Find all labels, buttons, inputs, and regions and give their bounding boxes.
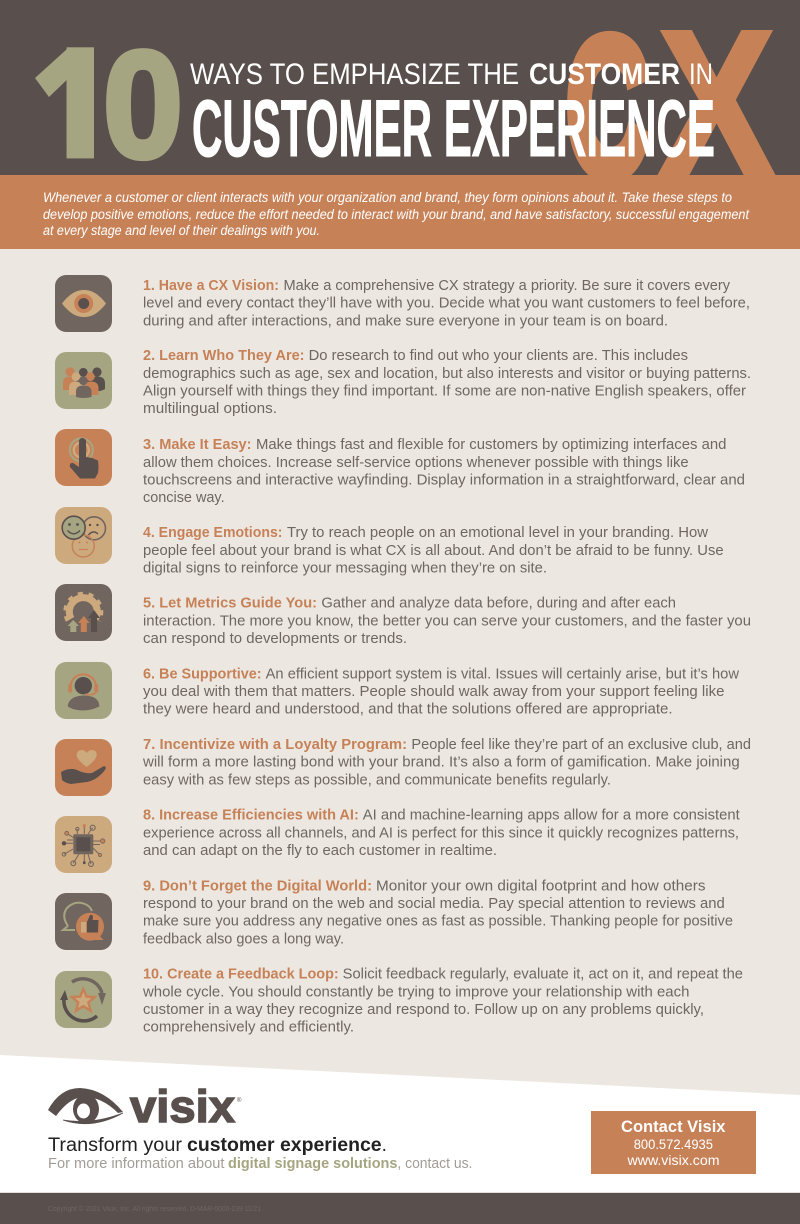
panel: header <box>0 0 800 175</box>
item 2 text: Do research to find out who your clients are. This includes <box>309 348 688 364</box>
tagline: customer experience <box>187 1135 382 1156</box>
logo: visix eye: ® <box>237 1097 242 1104</box>
item 8 text: AI and machine-learning apps allow for a more consistent <box>363 808 740 824</box>
panel: intro band <box>0 175 800 249</box>
icon: feedback loop star <box>55 971 112 1028</box>
tagline: . <box>382 1135 387 1156</box>
item 6 text: you deal with them that matters. People should walk away from your support feeling like <box>143 684 724 700</box>
contact box <box>591 1111 756 1174</box>
icon: touch hand <box>55 429 112 486</box>
item 2 text <box>143 348 751 417</box>
item 10 text <box>142 967 743 1036</box>
title line 1: WAYS TO EMPHASIZE THE <box>190 58 519 91</box>
item 3 text: 3. Make It Easy: <box>143 437 252 453</box>
item 10 text: 10. Create a Feedback Loop: <box>143 967 339 983</box>
item 8 text: and can adapt on the fly to each customer in realtime. <box>143 843 497 859</box>
item 4 text <box>143 525 724 577</box>
item 1 text: Make a comprehensive CX strategy a priority. Be sure it covers every <box>284 278 731 294</box>
item 8 text: experience across all channels, and AI is perfect for this since it quickly recognizes patterns, <box>143 825 739 841</box>
item 2 text: multilingual options. <box>143 401 277 417</box>
item 2 text: Align yourself with things they find important. If some are non-native English speakers, offer <box>143 384 746 400</box>
item 2 text: demographics such as age, sex and location, but also interests and visitor or buying patterns. <box>143 366 751 382</box>
item 5 text: can respond to developments or trends. <box>143 631 407 647</box>
big CX watermark <box>567 30 776 175</box>
tagline: Transform your <box>48 1135 183 1156</box>
big CX watermark: C <box>566 0 648 216</box>
icon: social thumbs up <box>55 893 112 950</box>
icon: support agent <box>55 662 112 719</box>
icon: people group <box>55 352 112 409</box>
panel: footer <box>0 1055 800 1193</box>
intro text <box>43 190 750 238</box>
logo wordmark: visix <box>130 1081 235 1132</box>
item 4 text: Try to reach people on an emotional level in your branding. How <box>287 525 709 541</box>
item 7 text: will form a more lasting bond with your brand. It’s also a form of gamification. Make joining <box>142 755 740 771</box>
item 10 text: customer in a way they recognize and respond to. Follow up on any problems quickly, <box>143 1002 704 1018</box>
item 3 text: concise way. <box>143 490 225 506</box>
contact box: Contact Visix <box>621 1118 726 1136</box>
item 7 text: People feel like they’re part of an exclusive club, and <box>411 737 751 753</box>
big number 10 <box>35 47 180 162</box>
big number 10: 1 <box>32 20 112 190</box>
item 5 text: interaction. The more you know, the better you can serve your customers, and the faster you <box>143 613 751 629</box>
item 9 text: make sure you address any negative ones as fast as possible. Thanking people for positive <box>143 914 733 930</box>
icon: heart in hand <box>55 739 112 796</box>
copyright text: Copyright © 2021 Visix, Inc. All rights reserved. D-MAR-0000-239 11/21 <box>48 1204 261 1213</box>
big number 10: 0 <box>103 20 183 190</box>
item 7 text <box>142 737 751 788</box>
item 2 text: 2. Learn Who They Are: <box>143 348 304 364</box>
icon: emotion faces <box>55 507 112 564</box>
icon: eye <box>55 275 112 332</box>
item 5 text <box>143 596 751 647</box>
item 8 text: 8. Increase Efficiencies with AI: <box>143 808 359 824</box>
item 3 text <box>143 437 745 506</box>
item 4 text: digital signs to reinforce your messaging when they’re on site. <box>143 561 547 577</box>
item 3 text: Make things fast and flexible for customers by optimizing interfaces and <box>256 437 726 453</box>
item 1 text: 1. Have a CX Vision: <box>143 278 279 294</box>
icon: AI chip <box>55 816 112 873</box>
contact line: digital signage solutions <box>228 1155 397 1172</box>
item 8 text <box>143 808 740 859</box>
intro text: at every stage and level of their dealings with you. <box>43 223 320 238</box>
item 4 text: 4. Engage Emotions: <box>143 525 282 541</box>
title line 1: CUSTOMER <box>529 58 680 91</box>
item 9 text: Monitor your own digital footprint and how others <box>376 878 706 894</box>
item 1 text: during and after interactions, and make sure everyone in your team is on board. <box>143 313 668 329</box>
intro text: Whenever a customer or client interacts with your organization and brand, they form opinions about it. Take these steps to <box>43 190 732 205</box>
contact box: 800.572.4935 <box>634 1137 713 1152</box>
intro text: develop positive emotions, reduce the effort needed to interact with your brand, and have satisfactory, successful engagement <box>43 207 750 222</box>
icon: metrics gear <box>55 584 112 641</box>
item 6 text: 6. Be Supportive: <box>143 666 262 682</box>
panel: copyright bar <box>0 1192 800 1224</box>
item 6 text: they were heard and understood, and that the solutions offered are appropriate. <box>143 702 673 718</box>
item 10 text: whole cycle. You should constantly be trying to improve your relationship with each <box>142 984 689 1000</box>
tagline <box>48 1135 387 1156</box>
item 9 text: feedback also goes a long way. <box>143 931 344 947</box>
logo: visix eye <box>48 1081 242 1132</box>
contact box: www.visix.com <box>626 1153 720 1168</box>
item 4 text: people feel about your brand is what CX is all about. And don’t be afraid to be funny. Use <box>143 543 724 559</box>
item 6 text: An efficient support system is vital. Issues will certainly arise, but it’s how <box>266 666 740 682</box>
item 9 text <box>143 878 733 947</box>
item 3 text: allow them choices. Increase self-service options whenever possible with things like <box>143 455 689 471</box>
item 9 text: 9. Don’t Forget the Digital World: <box>143 878 372 894</box>
contact line: , contact us. <box>397 1155 472 1172</box>
item 7 text: 7. Incentivize with a Loyalty Program: <box>143 737 407 753</box>
contact line: For more information about <box>48 1155 225 1172</box>
item 1 text <box>143 278 750 329</box>
item 6 text <box>143 666 740 718</box>
item 7 text: easy with as few steps as possible, and communicate benefits regularly. <box>143 772 611 788</box>
item 10 text: comprehensively and efficiently. <box>143 1020 354 1036</box>
contact line <box>48 1155 472 1172</box>
item 10 text: Solicit feedback regularly, evaluate it, act on it, and repeat the <box>343 967 743 983</box>
title line 1: IN <box>689 58 713 91</box>
item 3 text: touchscreens and interactive wayfinding. Display information in a straightforward, clear and <box>143 472 745 488</box>
item 9 text: respond to your brand on the web and social media. Pay special attention to reviews and <box>143 896 725 912</box>
item 5 text: Gather and analyze data before, during and after each <box>321 596 676 612</box>
item 5 text: 5. Let Metrics Guide You: <box>143 596 317 612</box>
item 1 text: level and every contact they’ll have with you. Decide what you want customers to feel before, <box>143 296 750 312</box>
